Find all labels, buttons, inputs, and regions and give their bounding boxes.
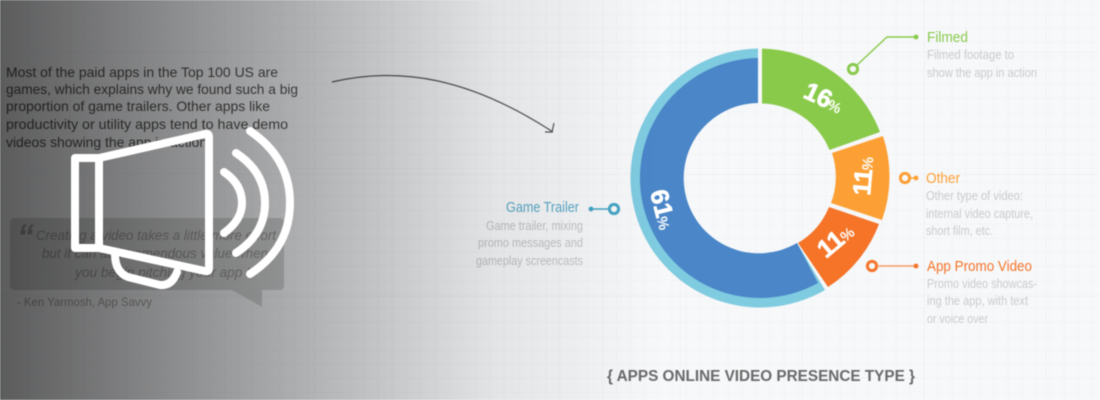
label: app promo video: ing the app, with text [927,294,1028,308]
label: other: Other [926,170,960,187]
label: other [926,170,1033,238]
label: filmed: Filmed footage to [927,48,1014,62]
curved arrow [332,75,554,132]
quote bubble: you begin pitching your app ! [74,264,250,280]
label: other: internal video capture, [926,207,1033,221]
connector: filmed [848,35,918,74]
segment: app promo video 11% [798,207,879,287]
value: 11% app promo: 11% [812,217,860,264]
value: 11% other: 11% [848,155,879,197]
quote attribution: - Ken Yarmosh, App Savvy [17,295,152,309]
label: app promo video: App Promo Video [927,258,1032,275]
label: app promo video [927,258,1037,326]
intro paragraph: productivity or utility apps tend to have demo [6,116,288,132]
label: other: Other type of video: [926,189,1023,203]
quote bubble: “ [17,218,34,256]
label: game trailer: gameplay screencasts [476,254,583,268]
connector: game trailer [589,204,619,214]
value: 61%: 61% [644,187,681,232]
label: filmed [927,29,1037,80]
label: game trailer: Game Trailer [506,199,579,216]
label: game trailer [476,199,583,268]
value: 16%: 16% [799,77,848,119]
intro paragraph: Most of the paid apps in the Top 100 US are [6,64,278,80]
label: filmed: show the app in action [927,66,1037,80]
quote bubble: but it can add tremendous value when [42,245,268,261]
label: app promo video: Promo video showcas- [927,277,1037,291]
label: game trailer: Game trailer, mixing [486,219,583,233]
quote bubble [10,218,284,307]
intro paragraph: videos showing the app in action. [6,134,211,150]
label: game trailer: promo messages and [478,236,583,250]
label: other: short film, etc. [926,224,993,238]
icon: white speaker megaphone [75,131,290,285]
intro paragraph: games, which explains why we found such a big [6,81,298,97]
label: filmed: Filmed [927,29,968,46]
intro paragraph: proportion of game trailers. Other apps like [6,98,270,114]
segment: other 11% [831,136,890,220]
quote bubble: Creating a video takes a little more effort [36,227,277,243]
segment: filmed 16% [762,48,880,150]
label: app promo video: or voice over [927,312,988,326]
connector: app promo video [867,261,918,271]
chart title: { APPS ONLINE VIDEO PRESENCE TYPE } [607,368,915,385]
connector: other [900,173,918,183]
intro paragraph [6,64,298,150]
segment: game trailer 61% [631,48,825,307]
donut chart [631,48,890,307]
